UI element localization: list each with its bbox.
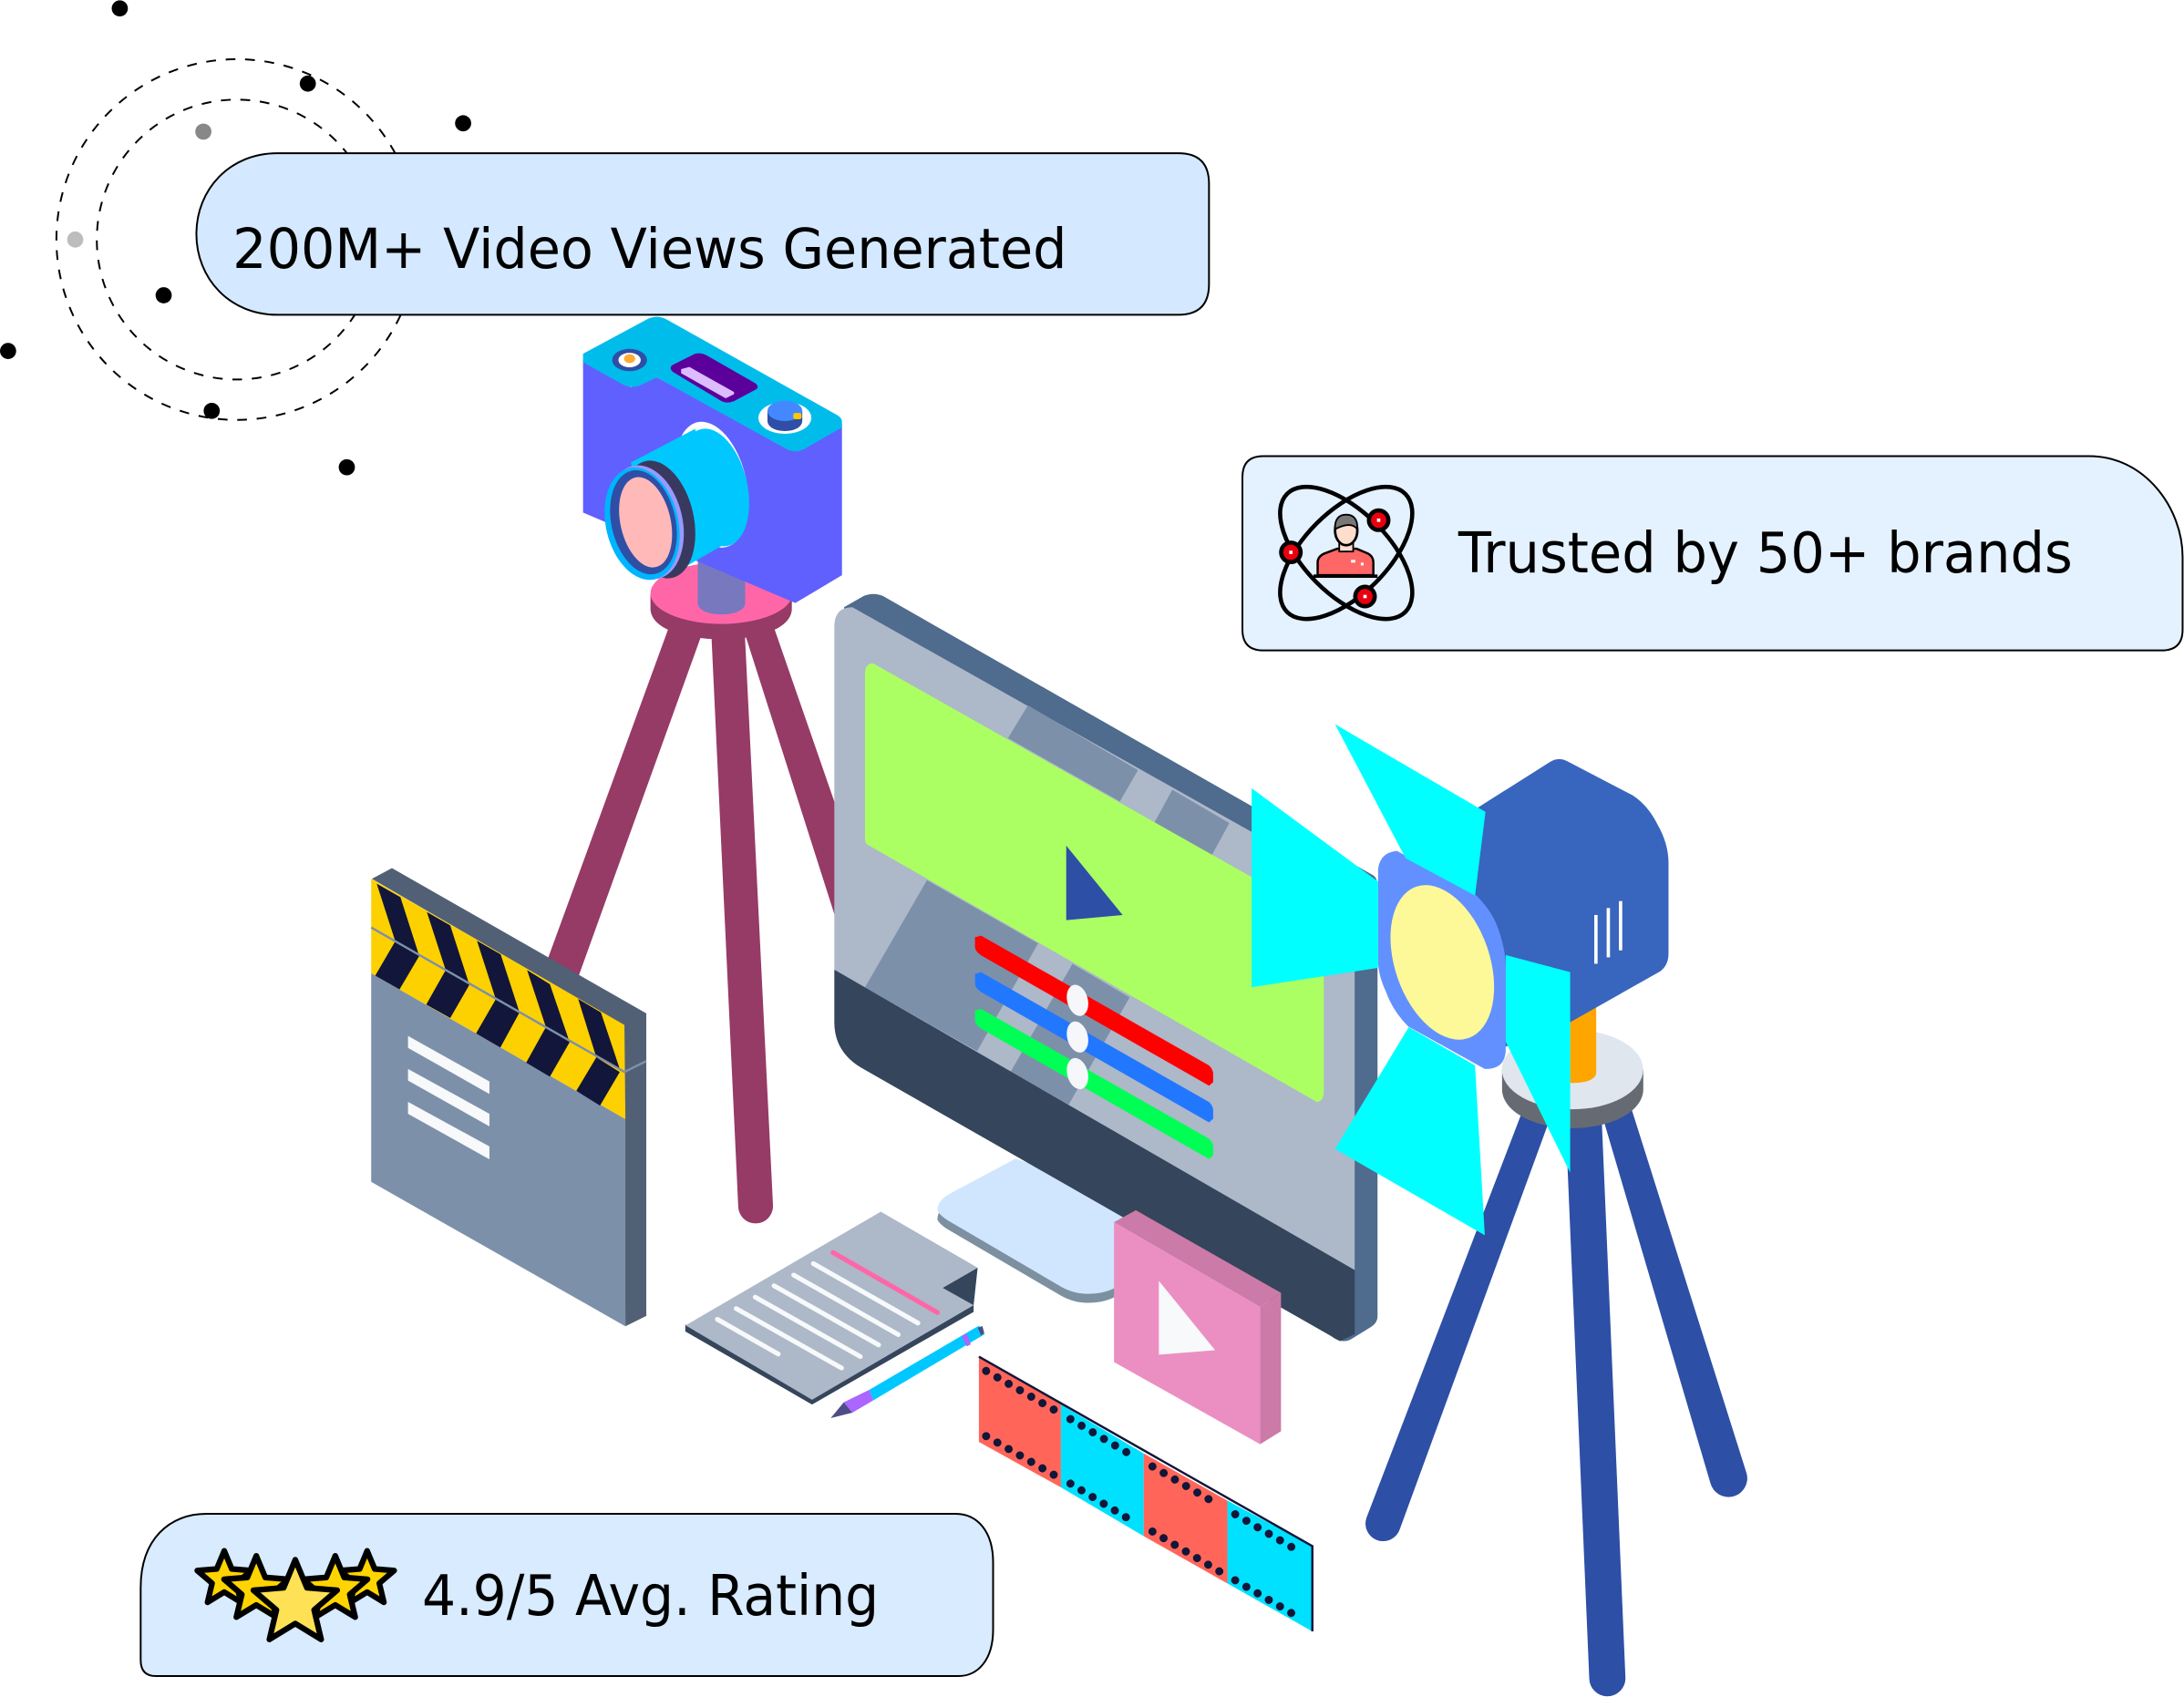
light front plate (1378, 851, 1506, 1069)
monitor screen (834, 607, 1355, 1270)
text: trusted brands: Trusted by 50+ brands (1458, 521, 2073, 586)
monitor back edge (836, 594, 1377, 1342)
film strip (979, 1357, 1313, 1631)
light pole (1571, 1003, 1596, 1083)
slider: blue (975, 972, 1213, 1122)
panel: video views (196, 153, 1209, 314)
document (685, 1211, 978, 1404)
camera body (583, 359, 842, 603)
clapper stripes (376, 884, 620, 1159)
camera tripod head (651, 550, 792, 639)
studio light (1252, 725, 1668, 1235)
barn door: top (1335, 725, 1486, 896)
panel: trusted brands (1242, 456, 2182, 651)
barn door: left (1252, 788, 1378, 987)
pencil (830, 1326, 984, 1418)
play box (1114, 1210, 1281, 1445)
document text lines (717, 1252, 937, 1368)
panel: rating (140, 1514, 994, 1676)
monitor bottom bezel (834, 970, 1355, 1342)
camera viewfinder window (671, 354, 757, 403)
green video area (865, 663, 1324, 1102)
slider knobs (1064, 982, 1092, 1092)
decorative dashed orbit rings (57, 59, 417, 420)
camera tripod legs (546, 612, 841, 1223)
barn door: right (1506, 955, 1571, 1173)
slider: red (975, 936, 1213, 1085)
film strip sprocket holes (986, 1371, 1303, 1620)
text: rating: 4.9/5 Avg. Rating (422, 1564, 879, 1629)
light lens (1372, 871, 1513, 1054)
clapperboard (371, 868, 646, 1326)
camera left knob (613, 349, 647, 371)
monitor stand (937, 1158, 1135, 1303)
barn door: bottom (1335, 1027, 1485, 1235)
light tripod legs (1365, 1100, 1747, 1696)
light vents (1596, 901, 1621, 963)
light tripod disc (1502, 1070, 1643, 1128)
studio light tripod (1365, 1003, 1747, 1696)
monitor screen diagonal bands (865, 705, 1230, 1105)
icon: atom person (1258, 464, 1435, 642)
play box triangle (1159, 1280, 1215, 1354)
monitor play button (1066, 846, 1123, 920)
decorative dots (0, 0, 471, 476)
camera top plate (583, 317, 842, 451)
text: video views: 200M+ Video Views Generated (232, 218, 1066, 282)
monitor (834, 594, 1377, 1342)
slider: green (975, 1009, 1213, 1159)
icon: five stars (197, 1551, 394, 1640)
light housing (1393, 759, 1668, 1047)
camera right knob (758, 402, 811, 434)
camera lens (664, 415, 760, 555)
camera (583, 317, 842, 603)
